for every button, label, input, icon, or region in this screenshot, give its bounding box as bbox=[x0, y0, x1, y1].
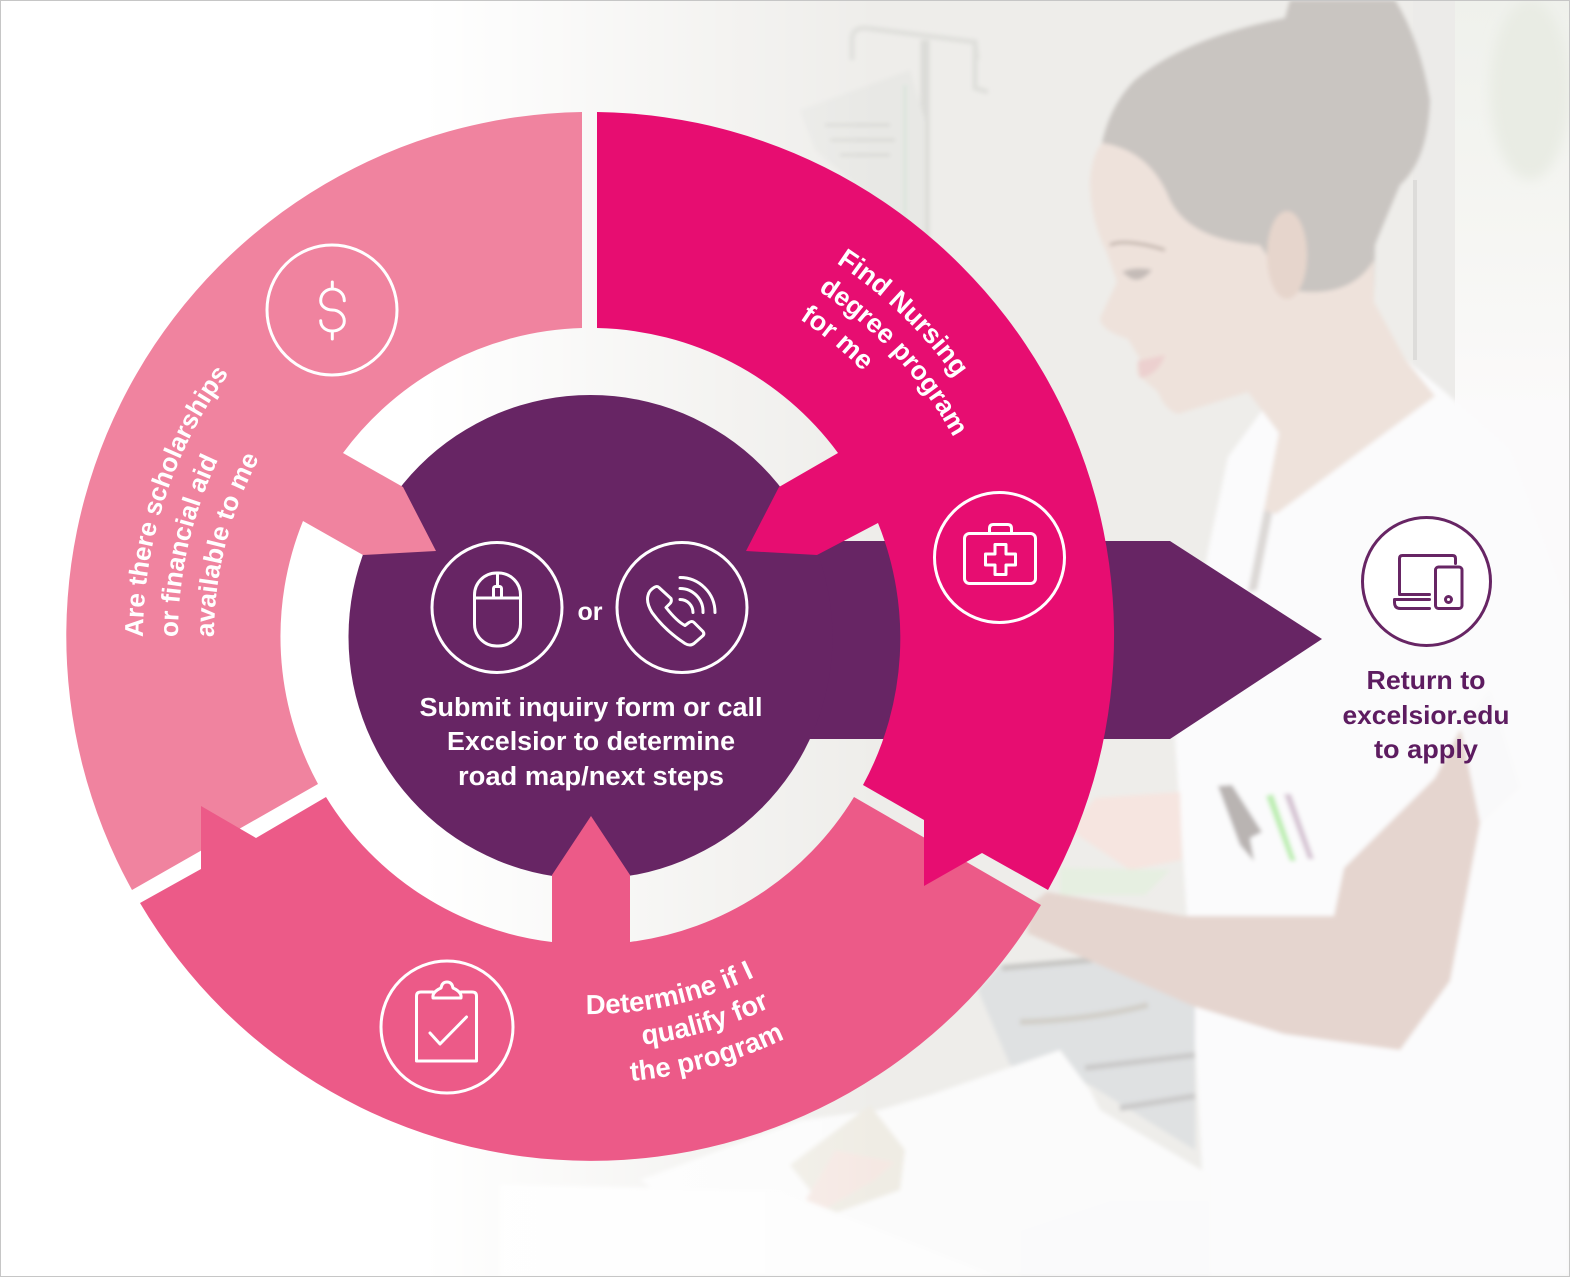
text: financial aid: or financial aid bbox=[161, 453, 218, 636]
icon: first aid kit bbox=[934, 492, 1064, 622]
text: the program: the program bbox=[630, 1027, 784, 1081]
text: return to apply: excelsior.edu bbox=[1342, 700, 1510, 730]
text: return to apply: to apply bbox=[1374, 734, 1479, 764]
text: qualify for: qualify for bbox=[642, 994, 766, 1049]
text: scholarships: Are there scholarships bbox=[125, 368, 227, 636]
panel: qualify segment bbox=[140, 797, 1041, 1161]
text: degree program: degree program bbox=[821, 280, 964, 436]
text: determine if I: Determine if I bbox=[587, 960, 753, 1014]
uniform bbox=[1175, 359, 1570, 1277]
text: center instructions: Submit inquiry form or call bbox=[420, 694, 762, 722]
hair bbox=[1102, 0, 1430, 300]
text: or: or bbox=[578, 598, 603, 626]
pens in pocket bbox=[1218, 785, 1262, 861]
arrow: purple pointing to apply step bbox=[780, 541, 1322, 739]
text: find nursing: Find Nursing bbox=[838, 248, 966, 378]
text: center instructions: road map/next steps bbox=[458, 763, 724, 791]
text: center instructions bbox=[420, 694, 762, 791]
icon: devices bbox=[1362, 518, 1490, 646]
sheets and patient bbox=[640, 1050, 1210, 1277]
icon: computer mouse bbox=[432, 542, 562, 672]
panel: scholarships segment bbox=[66, 112, 582, 890]
panel: center purple circle bbox=[348, 395, 832, 879]
icon: phone bbox=[617, 542, 747, 672]
icon: clipboard with check bbox=[381, 961, 513, 1093]
text: available to me: available to me bbox=[198, 454, 258, 636]
skin bbox=[1090, 143, 1435, 514]
text: return to apply bbox=[1342, 665, 1510, 764]
panel: find degree segment bbox=[597, 112, 1114, 890]
hand and tray bbox=[1070, 792, 1182, 870]
text: return to apply: Return to bbox=[1366, 665, 1486, 695]
text: for me: for me bbox=[802, 306, 870, 369]
text: center instructions: Excelsior to determine bbox=[447, 728, 735, 756]
arm bbox=[1027, 730, 1520, 1050]
drawers bbox=[978, 957, 1195, 1150]
icon: dollar bbox=[267, 245, 397, 375]
